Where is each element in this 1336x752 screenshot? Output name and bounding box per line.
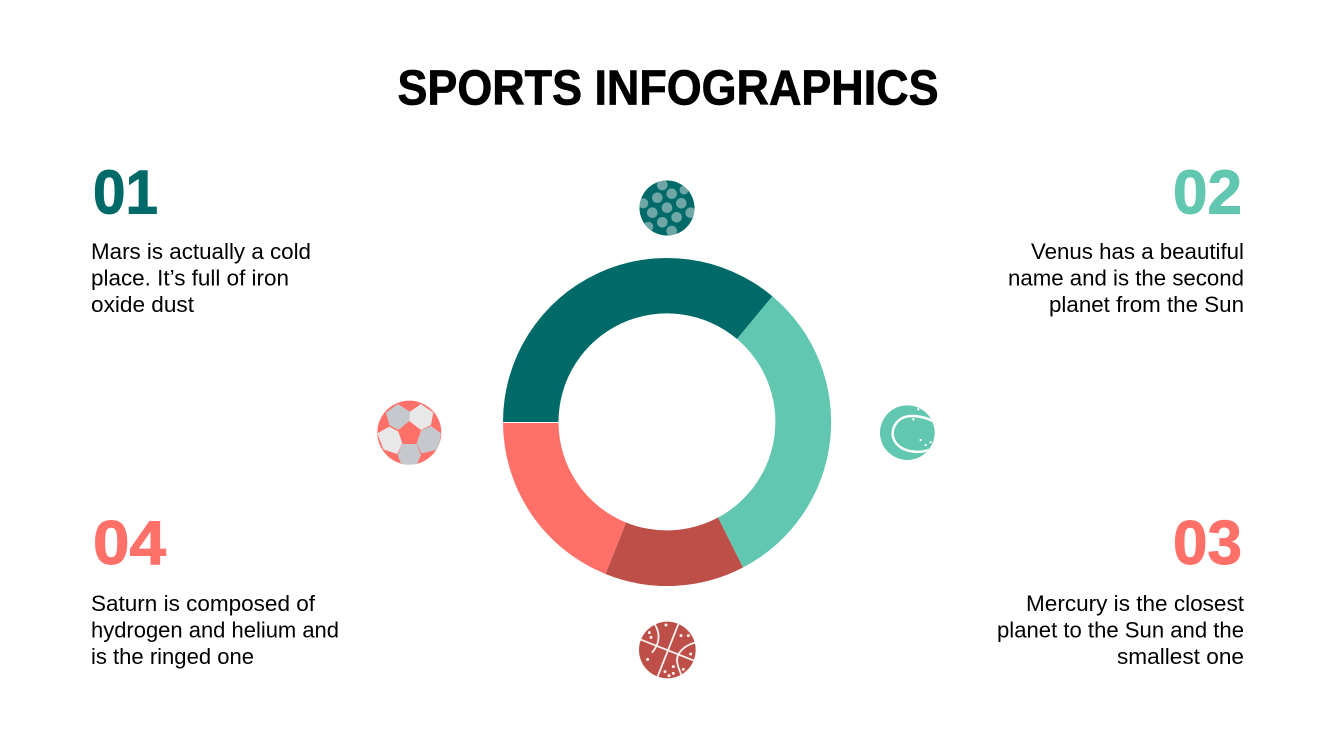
number 02: 02 bbox=[1173, 158, 1242, 228]
icon: soccer ball bbox=[377, 401, 441, 465]
number 03: 03 bbox=[1173, 508, 1242, 578]
text block 04: hydrogen and helium and bbox=[91, 618, 339, 642]
text block 02 bbox=[1008, 239, 1244, 317]
donut chart bbox=[503, 258, 831, 586]
text block 04: Saturn is composed of bbox=[91, 591, 316, 616]
segment: brick bbox=[606, 518, 743, 586]
text block 01 bbox=[91, 239, 311, 317]
icon: tennis ball bbox=[880, 405, 935, 460]
text block 03: smallest one bbox=[1117, 644, 1244, 669]
icon: golf ball bbox=[638, 180, 696, 236]
panel: item 02 bbox=[1008, 158, 1244, 317]
number 01: 01 bbox=[93, 158, 158, 228]
text block 02: planet from the Sun bbox=[1049, 292, 1244, 317]
text block 01: place. It’s full of iron bbox=[91, 266, 289, 290]
panel: item 04 bbox=[91, 508, 339, 669]
number 04: 04 bbox=[93, 508, 166, 578]
text block 03 bbox=[997, 591, 1244, 669]
icon: basketball bbox=[639, 622, 696, 678]
text block 04: is the ringed one bbox=[91, 644, 254, 669]
text block 02: Venus has a beautiful bbox=[1031, 239, 1244, 264]
panel: item 03 bbox=[997, 508, 1244, 669]
title: SPORTS INFOGRAPHICS bbox=[398, 60, 938, 116]
segment: dark teal bbox=[503, 258, 772, 422]
text block 03: planet to the Sun and the bbox=[997, 618, 1244, 642]
text block 01: oxide dust bbox=[91, 292, 194, 317]
panel: item 01 bbox=[91, 158, 311, 317]
text block 04 bbox=[91, 591, 339, 669]
segment: coral bbox=[503, 423, 626, 574]
text block 01: Mars is actually a cold bbox=[91, 239, 311, 264]
text block 02: name and is the second bbox=[1008, 266, 1244, 290]
text block 03: Mercury is the closest bbox=[1026, 591, 1244, 616]
segment: mint bbox=[718, 296, 831, 568]
